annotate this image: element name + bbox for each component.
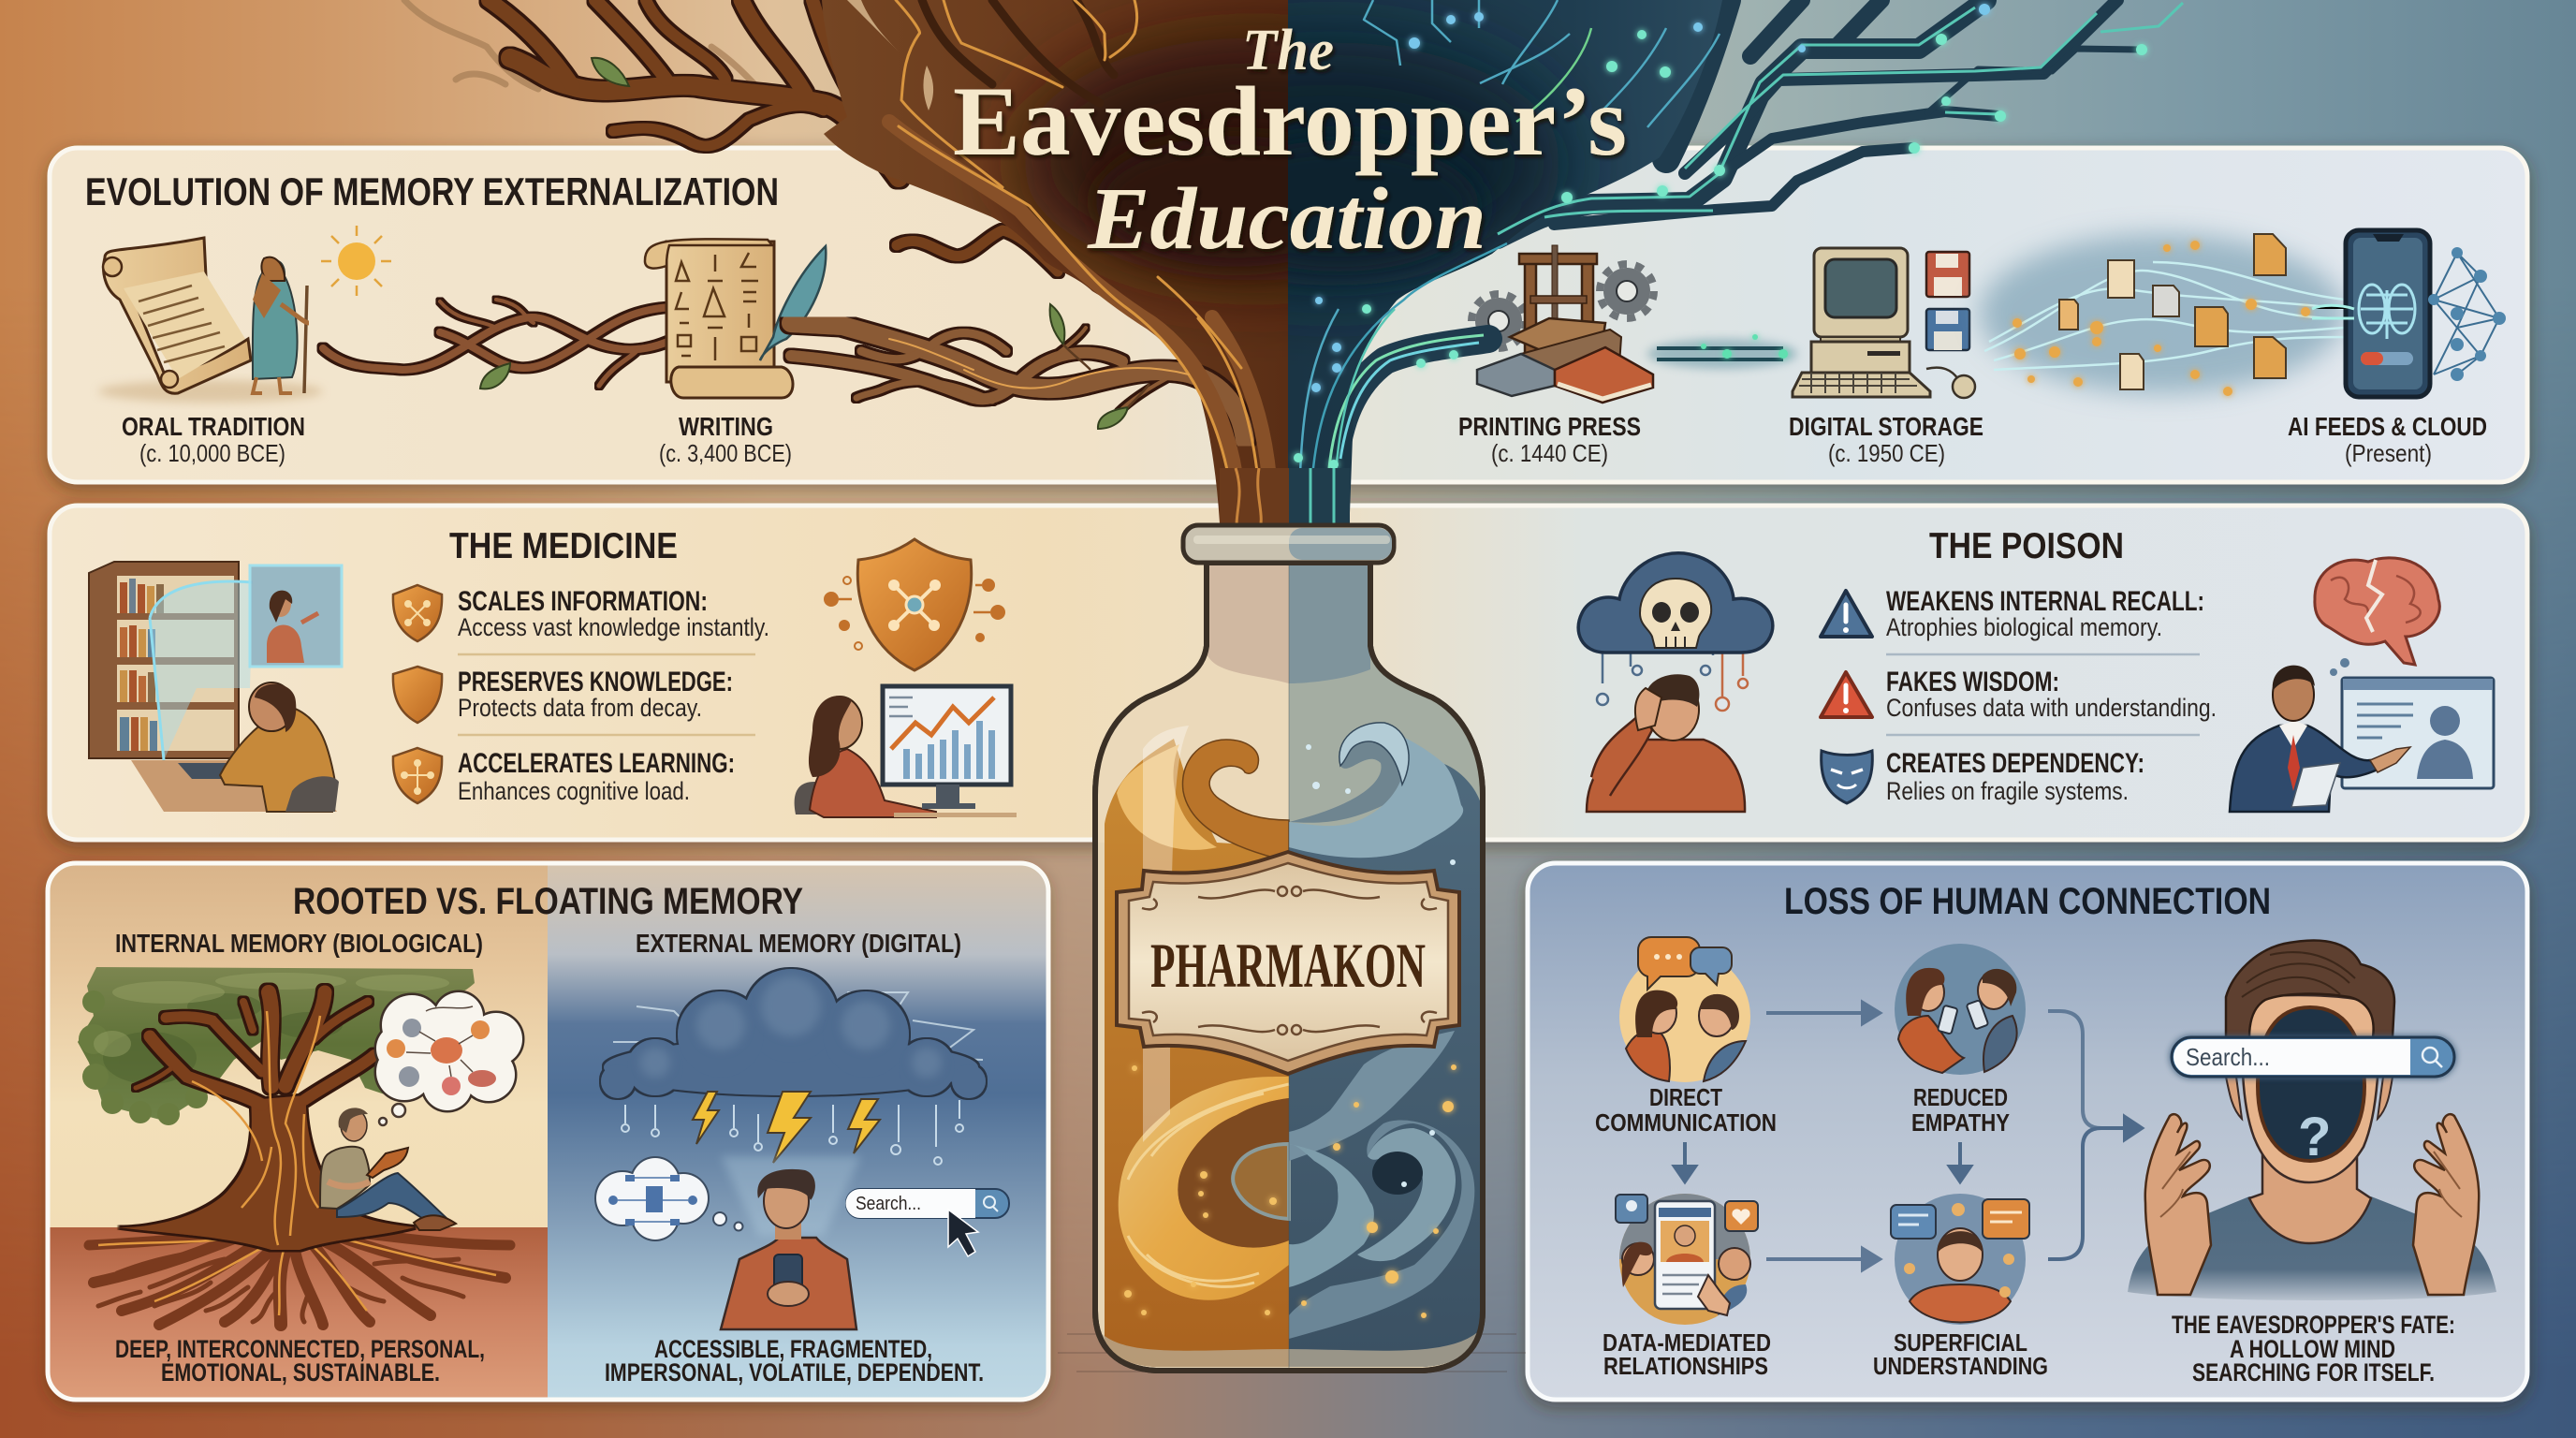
- divider lines between items: [458, 654, 755, 735]
- list item: weakens internal recall: Atrophies biological memory.: [1886, 613, 2162, 641]
- dark trunk and canopy mass: digital: [1288, 0, 1722, 513]
- label: ai feeds and cloud: AI FEEDS & CLOUD: [2288, 412, 2487, 441]
- list item: preserves knowledge: [393, 667, 733, 723]
- icon: cracked brain: [2315, 558, 2439, 665]
- arrow: data-mediated to superficial: [1766, 1249, 1880, 1269]
- center divide: [1288, 563, 1290, 1369]
- tree trunk and limbs: [119, 992, 415, 1250]
- text: the eavesdropper's fate: [2172, 1311, 2455, 1387]
- list item: weakens internal recall: WEAKENS INTERNAL RECALL:: [1886, 586, 2204, 617]
- text: internal memory traits: DEEP, INTERCONNECTED, PERSONAL,: [115, 1335, 485, 1363]
- list item: scales information: [393, 585, 769, 641]
- illustration: vintage computer: [1789, 248, 1983, 467]
- illustration: hollow faced person: ?: [2298, 1107, 2331, 1167]
- arrow: direct to data-mediated: [1675, 1142, 1695, 1181]
- illustration: organic tree half: [404, 0, 1488, 543]
- title: [953, 19, 1627, 268]
- title line: eavesdropper's: Eavesdropper’s: [953, 66, 1627, 176]
- list item: creates dependency: CREATES DEPENDENCY:: [1886, 748, 2144, 779]
- search bar with cursor: Search...: [856, 1194, 921, 1214]
- dark trunk and canopy mass: organic: [822, 0, 1288, 522]
- bottle outline: [1095, 563, 1483, 1371]
- list item: fakes wisdom: Confuses data with understanding.: [1886, 694, 2217, 722]
- bottle contents: [1095, 524, 1486, 1376]
- label: digital storage: DIGITAL STORAGE: [1789, 412, 1983, 441]
- panel: rooted vs floating memory: [48, 863, 1048, 1400]
- circuit nodes: glow: [1294, 4, 2147, 489]
- list item: creates dependency: Relies on fragile systems.: [1886, 777, 2129, 805]
- tree roots: [89, 1226, 510, 1325]
- hand: right: [2413, 1114, 2479, 1295]
- illustration: hollow faced person: [2128, 940, 2496, 1300]
- text: the eavesdropper's fate: A HOLLOW MIND: [2230, 1335, 2395, 1363]
- panel content: evolution timeline: [85, 169, 2506, 467]
- label: writing: WRITING: [679, 412, 773, 441]
- node: data-mediated relationships: DATA-MEDIATED: [1603, 1328, 1771, 1357]
- illustration: oral tradition scroll and figure: [98, 226, 391, 467]
- node: reduced empathy: REDUCED: [1913, 1083, 2008, 1111]
- list item: weakens internal recall: [1821, 586, 2204, 641]
- illustration: presenter with screen: [2230, 658, 2494, 812]
- label: oral tradition: ORAL TRADITION: [122, 412, 305, 441]
- text: internal memory traits: [115, 1335, 485, 1387]
- bottle label: [1117, 852, 1459, 1074]
- illustration: pharmakon bottle: [1058, 524, 1526, 1376]
- label: printing press: (c. 1440 CE): [1491, 439, 1608, 467]
- node: reduced empathy: EMPATHY: [1911, 1108, 2010, 1137]
- timeline branches: organic: [791, 323, 1245, 440]
- list item: creates dependency: [1822, 748, 2144, 805]
- node: reduced empathy: [1895, 944, 2026, 1137]
- label: digital storage: [1789, 412, 1983, 467]
- list item: preserves knowledge: PRESERVES KNOWLEDGE:: [458, 667, 733, 697]
- panel content: the poison: [1578, 526, 2494, 812]
- data stream with documents: [1980, 234, 2349, 396]
- text: external memory traits: ACCESSIBLE, FRAGMENTED,: [654, 1335, 932, 1363]
- list item: preserves knowledge: Protects data from decay.: [458, 694, 702, 722]
- text: the eavesdropper's fate: SEARCHING FOR ITSELF.: [2192, 1358, 2435, 1387]
- illustration: writing scroll with quill: [645, 239, 826, 467]
- subheading: external memory: EXTERNAL MEMORY (DIGITAL): [636, 929, 961, 958]
- label: ai feeds and cloud: [2288, 412, 2487, 467]
- text: external memory traits: IMPERSONAL, VOLATILE, DEPENDENT.: [605, 1358, 984, 1387]
- list item: scales information: Access vast knowledge instantly.: [458, 613, 769, 641]
- faded background branches: [404, 0, 782, 112]
- heading: the poison: THE POISON: [1929, 526, 2124, 566]
- heading: evolution of memory externalization: EVOLUTION OF MEMORY EXTERNALIZATION: [85, 169, 779, 213]
- label: ai feeds and cloud: (Present): [2345, 439, 2432, 467]
- node: superficial understanding: SUPERFICIAL: [1894, 1328, 2027, 1357]
- label: printing press: [1458, 412, 1641, 467]
- circuit traces: glow: [1299, 0, 2183, 524]
- node: direct communication: [1595, 937, 1777, 1137]
- list item: scales information: SCALES INFORMATION:: [458, 586, 708, 617]
- arrow: reduced to superficial: [1950, 1142, 1970, 1181]
- text: external memory traits: [605, 1335, 984, 1387]
- list item: accelerates learning: Enhances cognitive load.: [458, 777, 690, 805]
- lower blue swirl: [1289, 1031, 1455, 1161]
- node: data-mediated relationships: [1603, 1194, 1771, 1380]
- arrow: bracket into fate: [2048, 1011, 2142, 1259]
- node: superficial understanding: [1873, 1194, 2048, 1380]
- illustration: person with phone: [721, 1156, 861, 1329]
- data stream: press to computer: [1647, 334, 1797, 369]
- bottle lip: [1183, 525, 1394, 563]
- label: digital storage: (c. 1950 CE): [1828, 439, 1945, 467]
- search bar: over the hollow face: [2172, 1037, 2454, 1077]
- thought bubble: interconnected memories: [376, 992, 522, 1125]
- list item: accelerates learning: [393, 748, 735, 805]
- trunk entering the bottle: [1220, 468, 1350, 534]
- list item: fakes wisdom: FAKES WISDOM:: [1886, 667, 2059, 697]
- illustration: twisted roots between scrolls: [323, 300, 674, 386]
- node: data-mediated relationships: RELATIONSHIPS: [1603, 1352, 1768, 1380]
- upper branches: organic: [489, 0, 1058, 271]
- leaves: organic: [480, 58, 1128, 429]
- illustration: analyst at monitor: [795, 686, 1017, 817]
- node: superficial understanding: UNDERSTANDING: [1873, 1352, 2048, 1380]
- divider lines between poison items: [1886, 654, 2200, 735]
- label text: pharmakon: PHARMAKON: [1150, 930, 1426, 1001]
- panel: medicine and poison background: [50, 506, 2527, 840]
- title line: the: The: [1242, 19, 1334, 82]
- subheading: internal memory: INTERNAL MEMORY (BIOLOGICAL): [115, 929, 483, 958]
- heading: rooted vs floating: ROOTED VS. FLOATING MEMORY: [293, 881, 803, 922]
- heading: the medicine: THE MEDICINE: [449, 526, 678, 566]
- bottle glass body: [1095, 563, 1483, 1371]
- text: internal memory traits: EMOTIONAL, SUSTAINABLE.: [161, 1358, 440, 1387]
- illustration: digital circuit tree half: [1288, 0, 2184, 513]
- search bar: over the hollow face: Search...: [2186, 1043, 2270, 1071]
- heading: loss of human connection: LOSS OF HUMAN CONNECTION: [1784, 881, 2271, 922]
- node: direct communication: COMMUNICATION: [1595, 1108, 1777, 1137]
- illustration: printing press: [1458, 245, 1654, 467]
- lower gold swirl: [1119, 1077, 1289, 1300]
- title line: education: Education: [1087, 170, 1486, 268]
- icon: large network shield: [824, 539, 1005, 670]
- list item: accelerates learning: ACCELERATES LEARNING:: [458, 748, 735, 779]
- right liquid: [1289, 764, 1483, 1376]
- node: direct communication: DIRECT: [1649, 1083, 1722, 1111]
- circuit branches: dark: [1334, 0, 2142, 468]
- text: the eavesdropper's fate: THE EAVESDROPPER'S FATE:: [2172, 1311, 2455, 1339]
- illustration: library with holographic screen: [89, 562, 342, 812]
- illustration: storm data cloud: [601, 969, 986, 1165]
- trunk streaks: organic: [889, 0, 1271, 534]
- label: printing press: PRINTING PRESS: [1458, 412, 1641, 441]
- hand: left: [2145, 1114, 2211, 1295]
- panel content: the medicine: [89, 526, 1017, 817]
- label: oral tradition: [122, 412, 305, 467]
- label: writing: (c. 3,400 BCE): [659, 439, 792, 467]
- label: writing: [659, 412, 792, 467]
- illustration: smartphone with brain and neural net: [2288, 230, 2506, 467]
- left liquid: [1105, 739, 1289, 1376]
- illustration: toxic cloud with skull: [1578, 553, 1773, 812]
- panel: loss of human connection: [1528, 863, 2527, 1400]
- illustration: rooted tree with reader: [78, 967, 510, 1325]
- arrow: direct to reduced: [1766, 1003, 1880, 1023]
- panel: evolution timeline background: [50, 148, 2527, 482]
- thought bubble: fragmented network: [596, 1158, 743, 1240]
- label: oral tradition: (c. 10,000 BCE): [139, 439, 285, 467]
- list item: fakes wisdom: [1821, 667, 2217, 722]
- search bar with cursor: [846, 1189, 1009, 1256]
